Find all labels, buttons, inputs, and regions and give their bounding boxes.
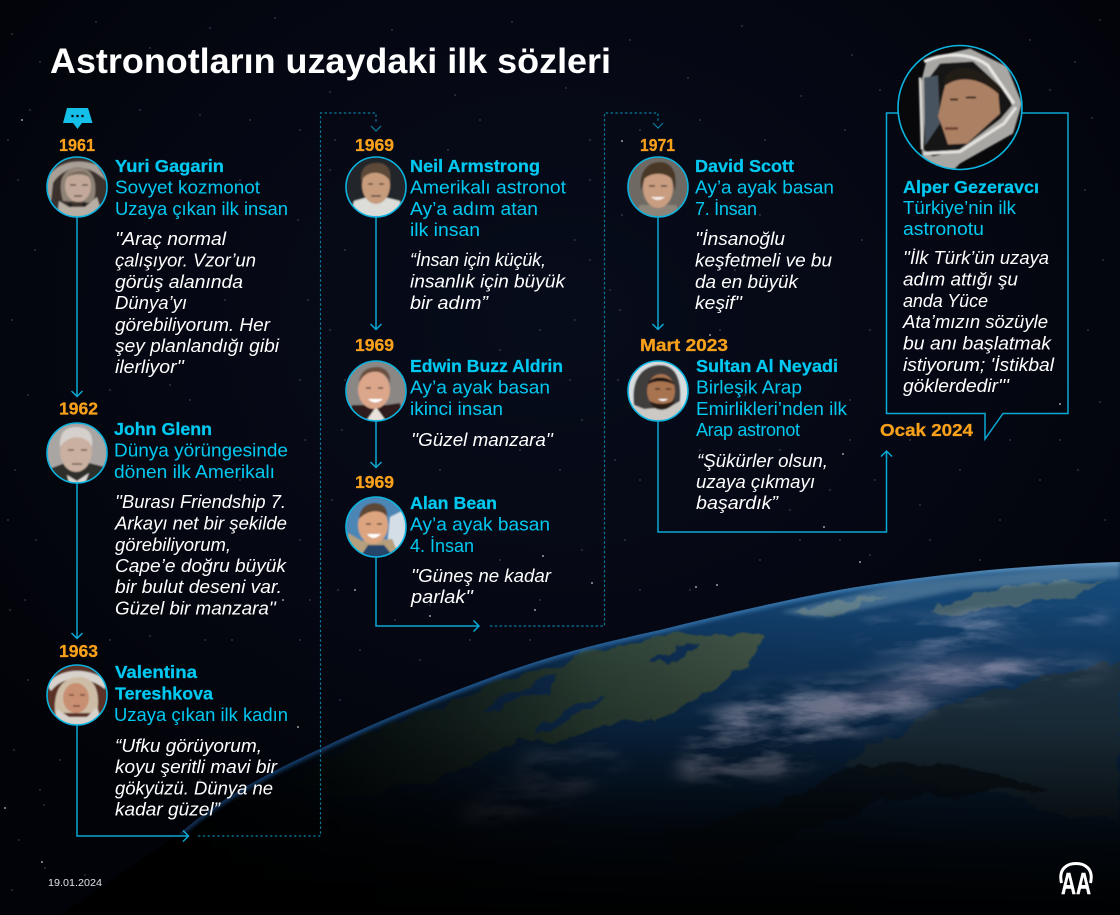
- quote: Tereshkova: [115, 736, 278, 820]
- logo: AA: AA: [1061, 866, 1091, 901]
- panel: Alan Bean: 1969: [355, 472, 394, 492]
- helmet stripes: [924, 55, 1014, 104]
- panel: John Glenn: [47, 398, 288, 618]
- quote: Al Neyadi: [696, 451, 828, 513]
- panel: Edwin Buzz Aldrin: 1969: [355, 335, 394, 355]
- panel: John Glenn: 1962: [59, 398, 98, 418]
- quote: Gagarin: görebiliyorum. Her: [115, 315, 271, 335]
- land: northern coast: [790, 582, 1104, 617]
- panel: Sultan Al Neyadi: Sultan Al Neyadi: [696, 356, 838, 376]
- panel: Alan Bean: Alan Bean: [410, 493, 497, 513]
- quote: Glenn: bir bulut deseni var.: [115, 577, 282, 597]
- panel: Alper Gezeravcı callout: [886, 46, 1068, 439]
- land: north america: [370, 631, 765, 766]
- quote: Glenn: görebiliyorum,: [115, 535, 231, 555]
- helmet shell: [920, 48, 1022, 174]
- portrait: Al Neyadi: [628, 361, 688, 421]
- quote: Gagarin: ilerliyor'': [115, 357, 185, 377]
- quote: Glenn: [114, 492, 287, 618]
- title: Astronotların uzaydaki ilk sözleri: [50, 42, 611, 81]
- panel: Neil Armstrong: Neil Armstrong: [410, 156, 540, 176]
- panel: Alper Gezeravcı callout: astronotu: [903, 219, 984, 239]
- quote: Scott: da en büyük: [695, 272, 799, 292]
- icon: speech bubble: [63, 108, 92, 129]
- quote: Armstrong: insanlık için büyük: [410, 272, 566, 292]
- quote: Tereshkova: gökyüzü. Dünya ne: [115, 778, 273, 798]
- quote: Gezeravcı: Ata’mızın sözüyle: [902, 312, 1048, 332]
- atmosphere rim: [180, 562, 1120, 833]
- quote: Gezeravcı: ''İlk Türk’ün uzaya: [903, 248, 1049, 268]
- panel: Yuri Gagarin: [47, 135, 288, 377]
- quote: Scott: [695, 229, 832, 313]
- quote: Tereshkova: koyu şeritli mavi bir: [115, 757, 278, 777]
- quote: Glenn: Arkayı net bir şekilde: [114, 514, 287, 534]
- quote: Gagarin: şey planlandığı gibi: [115, 336, 280, 356]
- panel: Neil Armstrong: Amerikalı astronot: [410, 178, 566, 198]
- panel: Alan Bean: Ay’a ayak basan: [410, 514, 550, 534]
- panel: Edwin Buzz Aldrin: Ay’a ayak basan: [410, 378, 550, 398]
- panel: Neil Armstrong: Ay’a adım atan: [410, 199, 538, 219]
- year: Ocak 2024: Ocak 2024: [880, 420, 973, 440]
- panel: Yuri Gagarin: Sovyet kozmonot: [115, 178, 260, 198]
- atmosphere haze: [780, 562, 1120, 618]
- panel: Valentina Tereshkova: Valentina: [115, 662, 197, 682]
- earth: [129, 562, 1120, 871]
- panel: Sultan Al Neyadi: Emirlikleri’nden ilk: [696, 399, 848, 419]
- panel: David Scott: [628, 135, 834, 313]
- portrait: Gagarin: [47, 157, 107, 217]
- quote: Tereshkova: “Ufku görüyorum,: [115, 736, 262, 756]
- portrait: Armstrong: [346, 157, 406, 217]
- quote: Glenn: ''Burası Friendship 7.: [115, 492, 286, 512]
- quote: Glenn: Cape’e doğru büyük: [115, 556, 287, 576]
- quote: Gezeravcı: istiyorum; 'İstikbal: [903, 355, 1055, 375]
- panel: David Scott: 1971: [640, 135, 675, 155]
- panel: Neil Armstrong: [346, 135, 566, 313]
- portrait: Scott: [628, 157, 688, 217]
- panel: David Scott: Ay’a ayak basan: [695, 178, 834, 198]
- panel: Sultan Al Neyadi: Birleşik Arap: [696, 378, 802, 398]
- quote: Scott: keşfetmeli ve bu: [695, 250, 832, 270]
- quote: Gezeravcı: adım attığı şu: [903, 270, 1018, 290]
- panel: Valentina Tereshkova: Uzaya çıkan ilk kadın: [114, 705, 288, 725]
- quote: Aldrin: ''Güzel manzara'': [411, 430, 554, 450]
- quote: Al Neyadi: “Şükürler olsun,: [697, 451, 828, 471]
- quote: Al Neyadi: başardık”: [696, 493, 779, 513]
- face: [938, 70, 1000, 144]
- portrait: Gezeravcı: [898, 46, 1022, 174]
- date: 19.01.2024: [48, 877, 102, 889]
- quote: Gagarin: [115, 229, 280, 377]
- panel: Valentina Tereshkova: [47, 641, 288, 820]
- quote: Armstrong: [410, 250, 566, 313]
- clouds: southern streaks: [471, 744, 618, 816]
- quote: Gagarin: Dünya’yı: [115, 293, 187, 313]
- clouds: pink band: [790, 655, 1080, 715]
- clouds: main band: [678, 612, 1116, 780]
- portrait: Bean: [346, 497, 406, 557]
- quote: Gezeravcı: [902, 248, 1055, 396]
- panel: John Glenn: Dünya yörüngesinde: [114, 440, 288, 460]
- panel: Neil Armstrong: ilk insan: [410, 220, 480, 240]
- panel: David Scott: 7. İnsan: [695, 199, 757, 219]
- panel: Yuri Gagarin: Uzaya çıkan ilk insan: [115, 199, 288, 219]
- quote: Armstrong: bir adım”: [410, 293, 489, 313]
- panel: Sultan Al Neyadi: Arap astronot: [696, 420, 800, 440]
- panel: Sultan Al Neyadi: [628, 335, 848, 513]
- helmet interior: [923, 62, 1012, 156]
- quote: Gagarin: görüş alanında: [115, 272, 243, 292]
- panel: Alper Gezeravcı callout: Türkiye’nin ilk: [903, 198, 1017, 218]
- panel: John Glenn: dönen ilk Amerikalı: [114, 462, 275, 482]
- panel: Valentina Tereshkova: 1963: [59, 641, 98, 661]
- panel: Alan Bean: [346, 472, 552, 607]
- quote: Bean: [410, 566, 552, 607]
- panel: Yuri Gagarin: 1961: [59, 135, 95, 155]
- panel: Alper Gezeravcı callout: Alper Gezeravcı: [903, 177, 1039, 197]
- panel: David Scott: David Scott: [695, 156, 794, 176]
- quote: Gagarin: ''Araç normal: [115, 229, 227, 249]
- quote: Scott: keşif'': [695, 293, 743, 313]
- quote: Bean: parlak'': [410, 587, 474, 607]
- panel: Alan Bean: 4. İnsan: [410, 536, 474, 556]
- quote: Scott: ''İnsanoğlu: [695, 229, 785, 249]
- land: lakes: [480, 642, 700, 735]
- panel: Sultan Al Neyadi: Mart 2023: [640, 335, 728, 355]
- quote: Gagarin: çalışıyor. Vzor’un: [115, 250, 256, 270]
- quote: Armstrong: “İnsan için küçük,: [410, 250, 546, 270]
- portrait: Aldrin: [346, 361, 406, 421]
- panel: Edwin Buzz Aldrin: ikinci insan: [410, 399, 503, 419]
- panel: Valentina Tereshkova: Tereshkova: [115, 684, 213, 704]
- panel: Edwin Buzz Aldrin: Edwin Buzz Aldrin: [410, 356, 563, 376]
- callout box: [886, 113, 1068, 439]
- land: lower right: [845, 660, 1120, 796]
- quote: Tereshkova: kadar güzel”: [115, 800, 221, 820]
- panel: Yuri Gagarin: Yuri Gagarin: [115, 156, 224, 176]
- panel: Neil Armstrong: 1969: [355, 135, 394, 155]
- visor: [924, 76, 940, 146]
- portrait: Tereshkova: [47, 665, 107, 725]
- connector lines: [72, 113, 892, 842]
- quote: Bean: ''Güneş ne kadar: [411, 566, 552, 586]
- logo: AA: [1061, 864, 1091, 901]
- quote: Glenn: Güzel bir manzara'': [115, 598, 277, 618]
- quote: Al Neyadi: uzaya çıkmayı: [696, 472, 815, 492]
- panel: John Glenn: John Glenn: [114, 419, 212, 439]
- land: dark southern islands: [760, 762, 1046, 813]
- quote: Gezeravcı: göklerdedir''': [903, 376, 1010, 396]
- panel: Edwin Buzz Aldrin: [346, 335, 563, 450]
- quote: Gezeravcı: bu anı başlatmak: [903, 334, 1052, 354]
- quote: Gezeravcı: anda Yüce: [903, 291, 988, 311]
- portrait: Glenn: [47, 423, 107, 483]
